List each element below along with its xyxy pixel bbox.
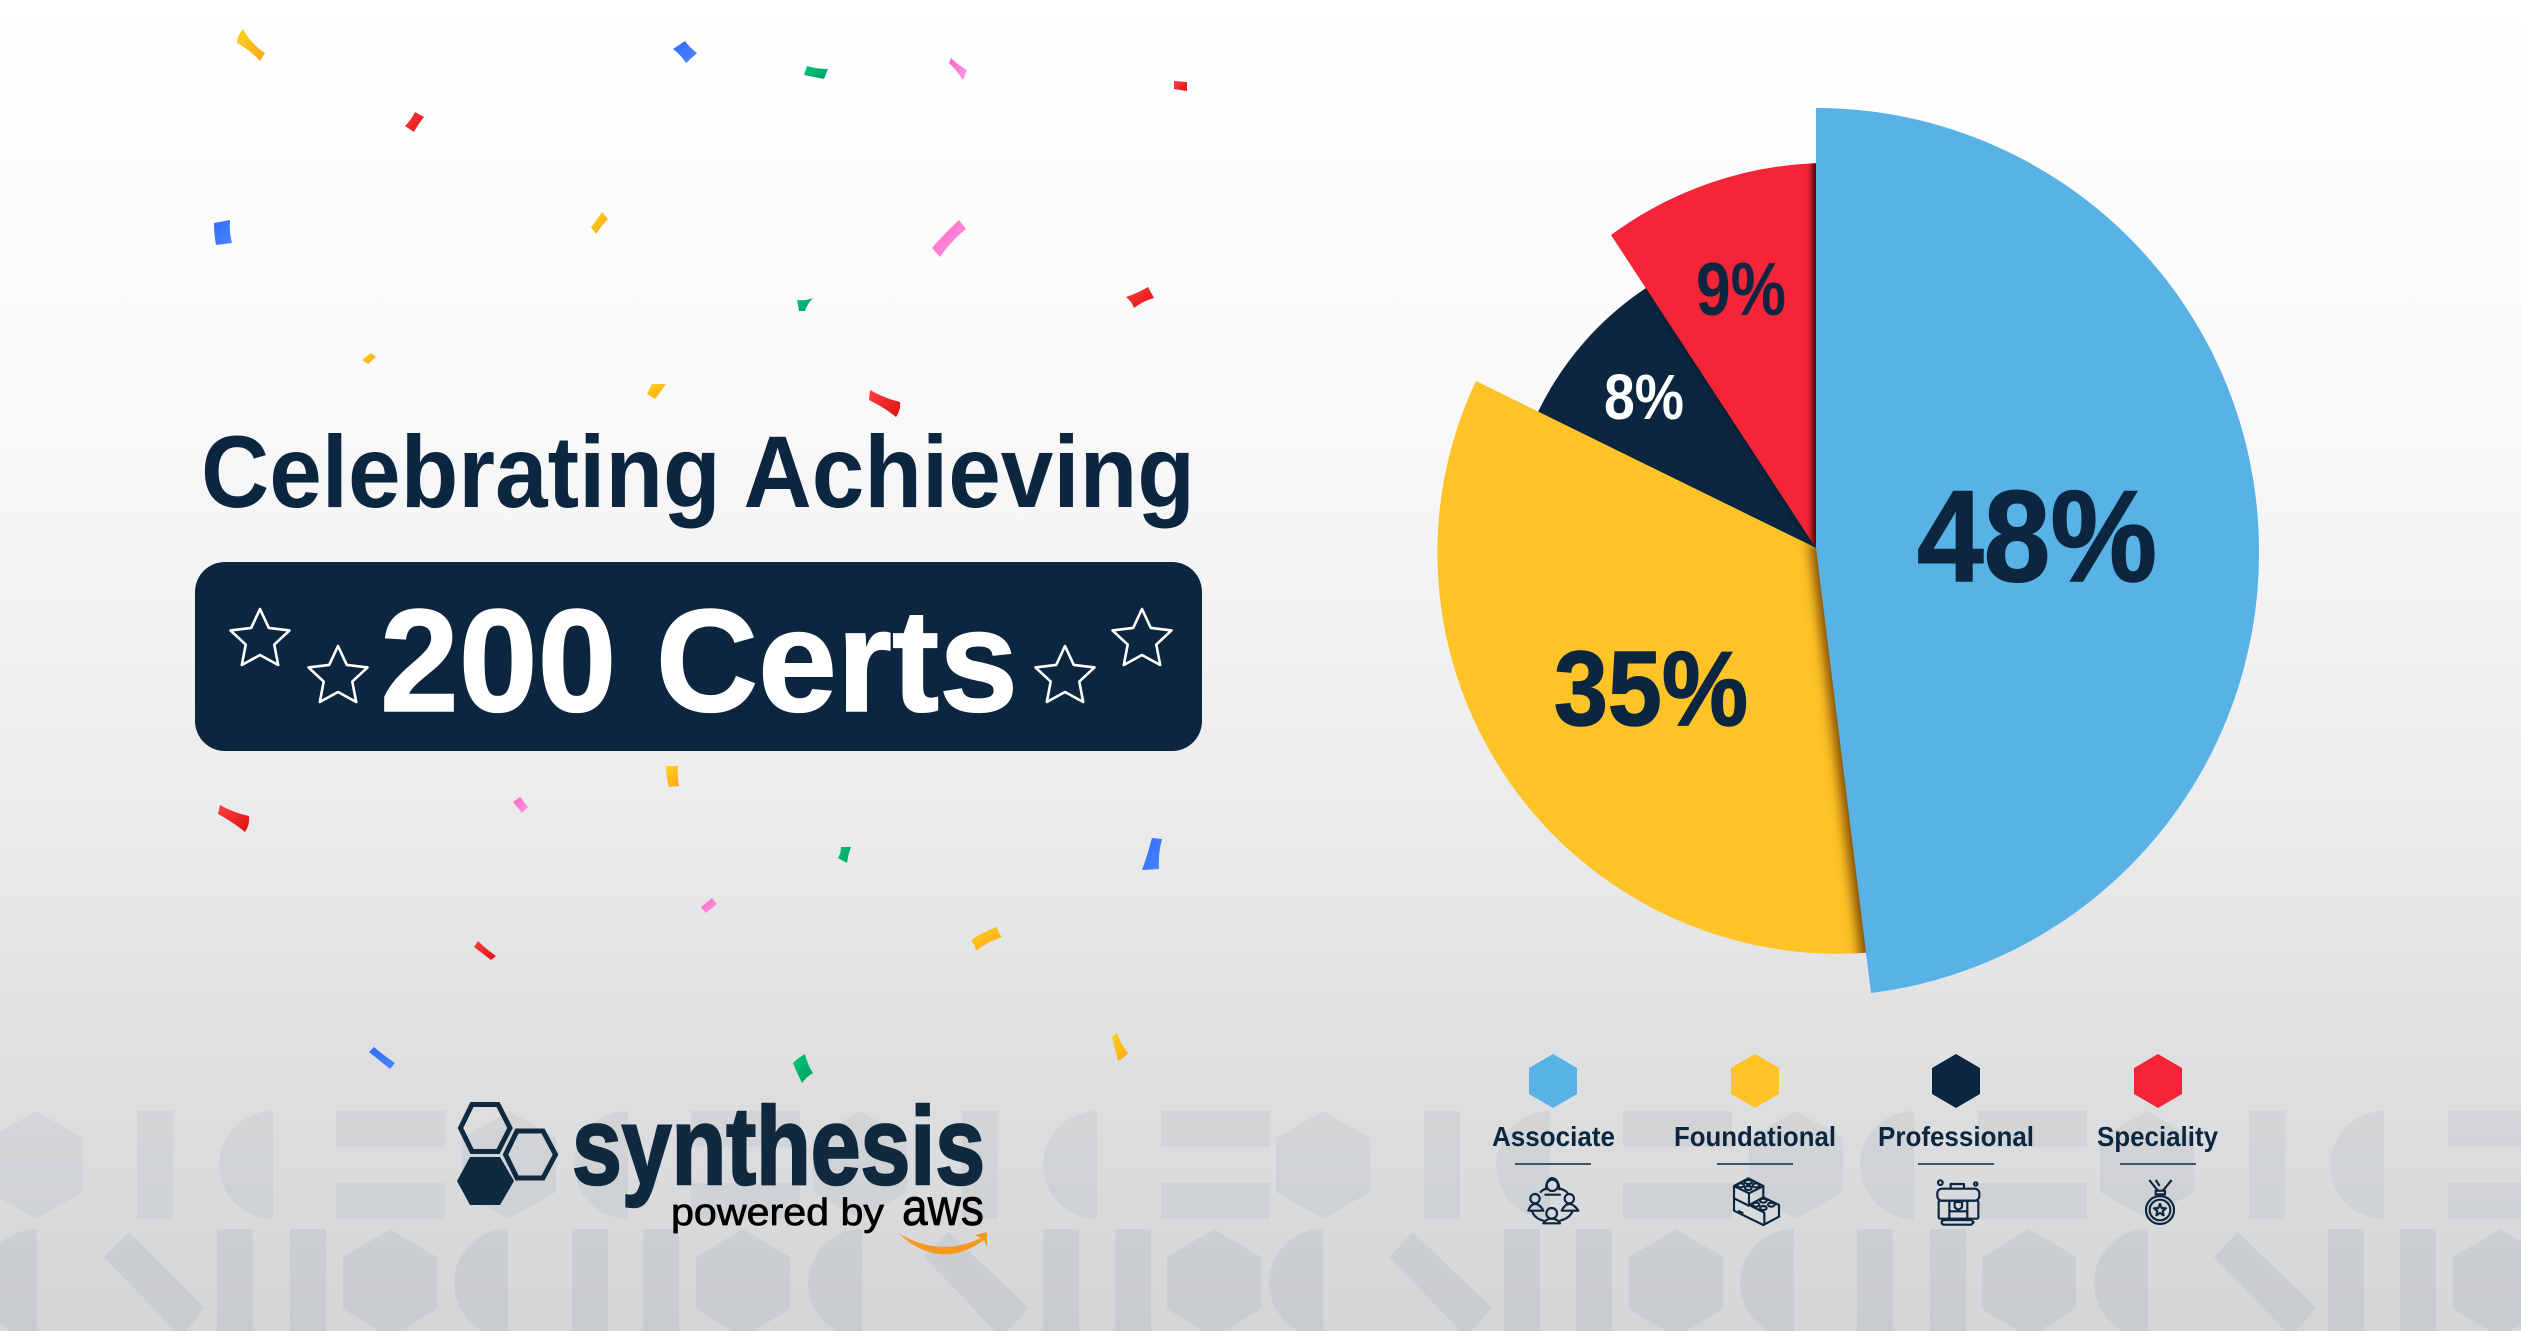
logo hexagons xyxy=(457,1104,556,1205)
shadow on foundational xyxy=(1802,542,1866,954)
title: Celebrating Achieving: Celebrating Achieving xyxy=(201,415,1195,529)
aws: aws xyxy=(902,1179,984,1237)
foundational swatch xyxy=(1731,1054,1779,1108)
foundational label: Foundational xyxy=(1674,1121,1836,1152)
banner: 200 Certs xyxy=(195,562,1202,751)
associate swatch xyxy=(1529,1054,1577,1108)
label 9%: 9% xyxy=(1696,247,1786,331)
slice: associate 48% xyxy=(1816,108,2259,993)
professional label: Professional xyxy=(1878,1121,2034,1152)
legend: foundational xyxy=(1674,1054,1836,1225)
associate rule xyxy=(1515,1163,1591,1165)
stars xyxy=(230,609,1172,702)
legend xyxy=(1492,1054,2218,1225)
shadow on speciality xyxy=(1808,163,1816,548)
pie chart xyxy=(1437,108,2259,1000)
banner text: 200 Certs xyxy=(380,579,1018,742)
legend: speciality xyxy=(2097,1054,2218,1224)
slice: speciality 9% xyxy=(1611,163,1820,548)
slice: professional 8% xyxy=(1538,288,1816,548)
foundational rule xyxy=(1717,1163,1793,1165)
powered by: powered by xyxy=(671,1192,884,1234)
professional rule xyxy=(1918,1163,1994,1165)
speciality swatch xyxy=(2134,1054,2182,1108)
icon: team circle xyxy=(1528,1178,1578,1223)
wordmark: synthesis xyxy=(572,1085,985,1208)
label 48%: 48% xyxy=(1917,463,2157,609)
banner background xyxy=(195,562,1202,751)
background pattern xyxy=(0,1111,2521,1331)
slice: foundational 35% xyxy=(1437,381,1876,954)
icon: building blocks xyxy=(1734,1178,1779,1225)
aws smile xyxy=(898,1232,987,1254)
legend: associate xyxy=(1492,1054,1615,1223)
icon: medal xyxy=(2146,1180,2174,1224)
speciality label: Speciality xyxy=(2097,1121,2218,1152)
speciality rule xyxy=(2120,1163,2196,1165)
icon: briefcase xyxy=(1937,1180,1979,1225)
legend: professional xyxy=(1878,1054,2034,1225)
label 8%: 8% xyxy=(1604,361,1684,433)
confetti xyxy=(214,29,1187,1083)
professional swatch xyxy=(1932,1054,1980,1108)
logo: synthesis powered by aws xyxy=(457,1085,987,1254)
label 35%: 35% xyxy=(1554,630,1748,748)
shadow on professional xyxy=(1644,288,1816,548)
associate label: Associate xyxy=(1492,1121,1615,1152)
